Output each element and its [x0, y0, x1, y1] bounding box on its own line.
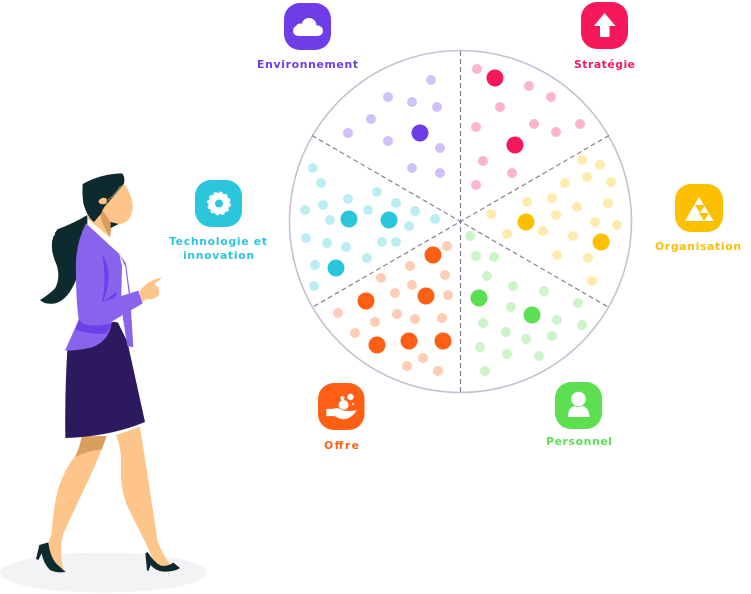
ear — [98, 198, 107, 204]
blouse — [87, 219, 130, 324]
hand pointing — [139, 277, 162, 302]
wheel diagram — [290, 50, 632, 392]
back leg — [48, 436, 107, 571]
category: Technologie et innovation — [169, 180, 267, 262]
hair top — [82, 173, 124, 222]
icon: cloud — [284, 3, 331, 50]
chin hair — [111, 222, 119, 228]
sleeve — [80, 291, 143, 325]
right shoe — [145, 552, 180, 572]
category: Stratégie: Stratégie — [574, 58, 635, 71]
category: Technologie et innovation: Technologie et — [169, 235, 267, 248]
jacket fold — [102, 253, 117, 303]
thigh shadow — [75, 436, 107, 457]
category: Personnel — [546, 382, 612, 448]
icon: up arrow — [581, 2, 628, 49]
category: Offre — [318, 383, 364, 452]
category: Environnement — [257, 3, 358, 71]
category: Environnement: Environnement — [257, 58, 358, 71]
category: Organisation: Organisation — [655, 240, 741, 253]
icon: person — [555, 382, 602, 429]
icon: triangles — [675, 184, 723, 232]
category: Offre: Offre — [324, 439, 359, 452]
dots: Environnement — [343, 75, 445, 178]
jacket waist band — [75, 320, 112, 334]
icon: hand with bubbles — [318, 383, 364, 430]
ground shadow — [0, 553, 207, 593]
woman walking and pointing — [0, 173, 207, 593]
dots: Organisation — [486, 155, 622, 286]
category: Stratégie — [574, 2, 635, 71]
jacket — [65, 223, 122, 351]
neck and face — [87, 183, 133, 239]
dots: Offre — [333, 241, 453, 376]
dots: Stratégie — [471, 64, 585, 190]
dots: Technologie et innovation — [300, 163, 440, 291]
neck shadow — [101, 209, 112, 237]
category: Technologie et innovation: innovation — [183, 249, 254, 262]
icon: gear — [195, 180, 242, 227]
jacket flap — [119, 254, 133, 347]
category: Organisation — [655, 184, 741, 253]
hair ponytail — [40, 215, 87, 304]
dots: Personnel — [465, 231, 587, 376]
left shoe — [36, 542, 66, 572]
skirt — [65, 320, 145, 438]
category: Personnel: Personnel — [546, 435, 612, 448]
front leg — [116, 427, 171, 569]
